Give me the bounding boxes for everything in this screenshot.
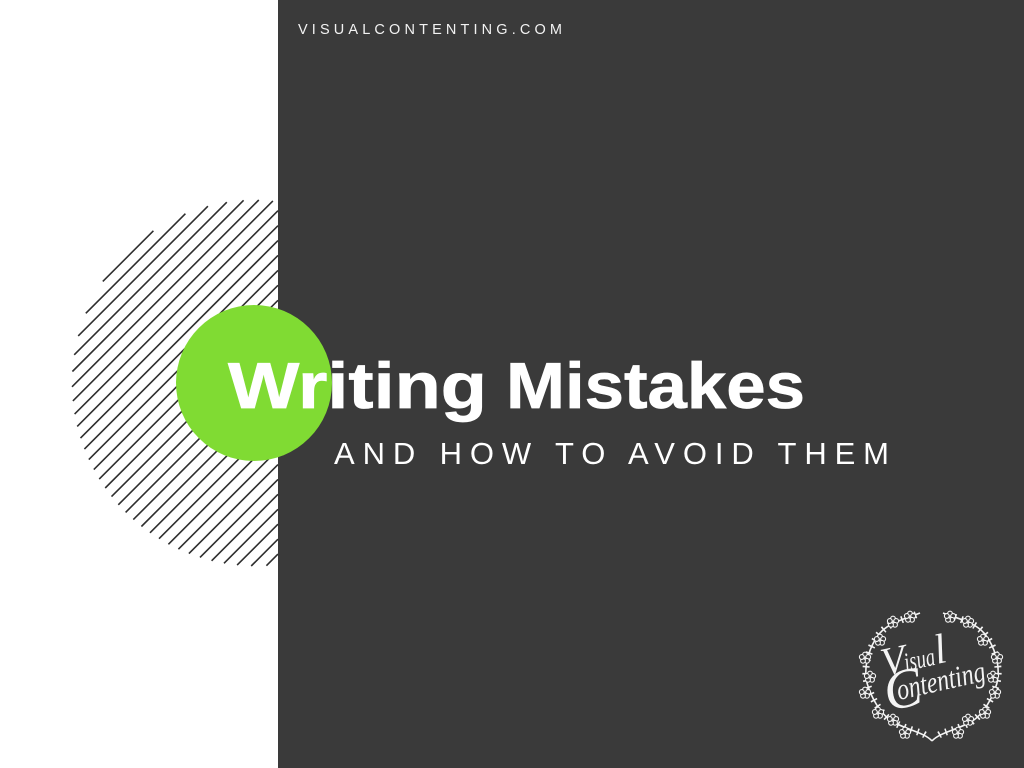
subtitle: AND HOW TO AVOID THEM xyxy=(334,436,889,471)
logo script text: C xyxy=(878,655,928,724)
logo script text: l xyxy=(930,626,950,674)
logo script text: ontenting xyxy=(893,655,988,707)
title: Mistakes xyxy=(506,349,805,422)
logo script text: V xyxy=(877,635,914,685)
title: Writing xyxy=(228,349,487,422)
website url: VISUALCONTENTING.COM xyxy=(298,22,562,38)
hatched circle xyxy=(72,200,278,566)
logo script text xyxy=(877,626,988,724)
logo script text: isua xyxy=(901,642,938,677)
logo: floral wreath xyxy=(859,611,1003,741)
wreath stems xyxy=(866,613,998,741)
title xyxy=(228,349,805,422)
green circle xyxy=(176,305,332,461)
wreath flowers xyxy=(859,611,1003,738)
dark panel xyxy=(278,0,1024,768)
